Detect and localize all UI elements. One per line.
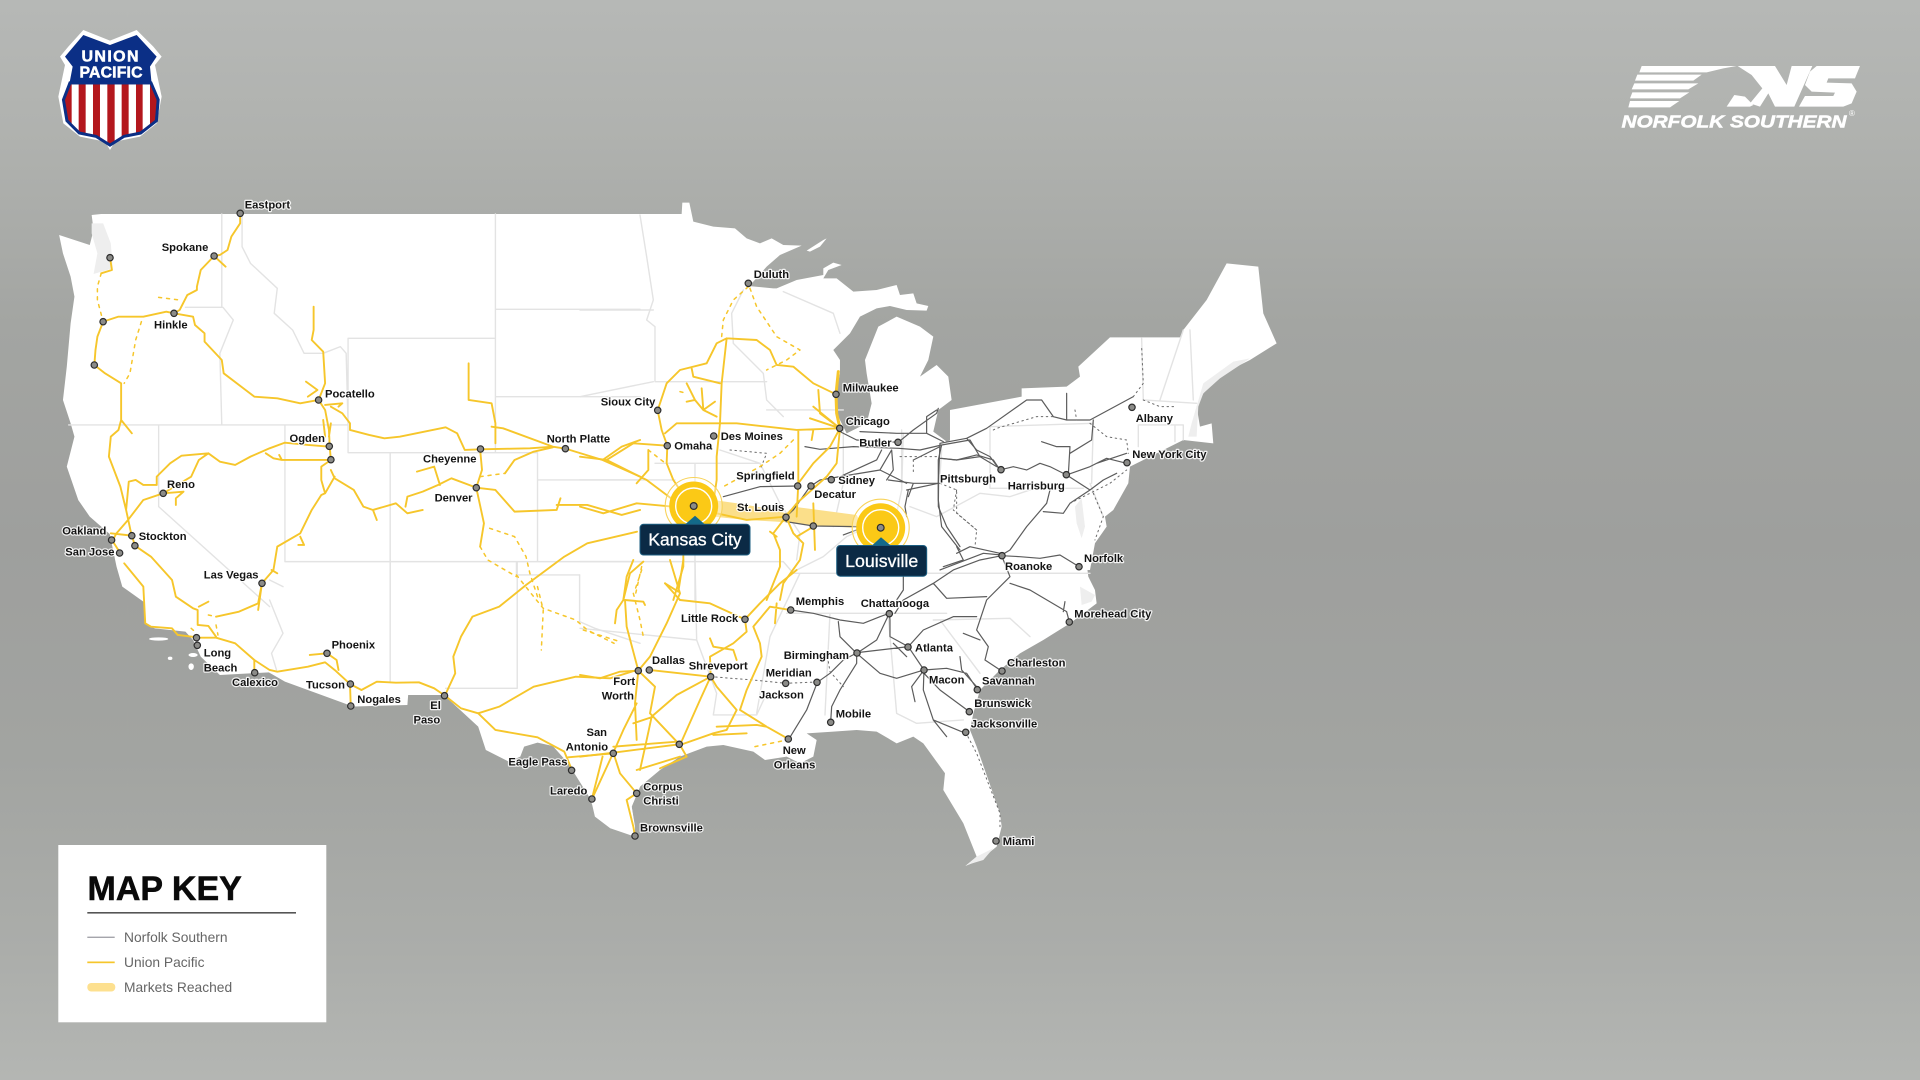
Reno: Reno	[167, 479, 195, 491]
Corpus Christi: Christi	[643, 796, 679, 808]
Albany	[1129, 404, 1174, 425]
Denver: Denver	[435, 492, 473, 504]
Hinkle	[154, 310, 188, 332]
Chicago: Chicago	[846, 416, 890, 428]
New York City	[1124, 449, 1207, 466]
Chattanooga	[861, 598, 930, 617]
logo: Norfolk Southern: NORFOLK SOUTHERN	[1622, 111, 1847, 131]
city markers and labels	[62, 200, 1207, 848]
Dallas: Dallas	[652, 655, 685, 667]
Las Vegas: Las Vegas	[204, 569, 259, 581]
Cheyenne	[423, 446, 484, 466]
Portland marker	[100, 318, 106, 325]
Shreveport	[689, 661, 748, 680]
Brownsville	[632, 822, 703, 839]
Las Vegas	[204, 569, 265, 586]
Reno	[160, 479, 195, 496]
Duluth	[745, 269, 789, 286]
Morehead City: Morehead City	[1074, 608, 1152, 620]
Chicago	[836, 416, 890, 431]
Norfolk: Norfolk	[1084, 553, 1124, 565]
Stockton: Stockton	[139, 531, 187, 543]
Duluth: Duluth	[754, 269, 789, 281]
Phoenix	[324, 639, 376, 656]
Laredo: Laredo	[550, 785, 587, 797]
Pocatello: Pocatello	[325, 388, 375, 400]
Meridian	[766, 667, 820, 686]
key item: Norfolk Southern: Norfolk Southern	[124, 930, 228, 945]
state borders	[69, 214, 1197, 723]
Pittsburgh	[940, 466, 1004, 485]
New Orleans: Orleans	[774, 759, 815, 771]
San Jose: San Jose	[65, 547, 114, 559]
Laredo	[550, 785, 595, 802]
Sioux City	[601, 397, 661, 413]
San Antonio: Antonio	[566, 741, 608, 753]
Dallas	[646, 655, 685, 673]
Sidney: Sidney	[838, 475, 876, 487]
St. Louis: St. Louis	[737, 502, 784, 514]
San Antonio: San	[586, 727, 607, 739]
Seattle marker	[107, 255, 113, 261]
Ogden: Ogden	[290, 433, 325, 445]
Springfield	[736, 471, 801, 489]
markets reached band	[713, 500, 863, 528]
Hinkle: Hinkle	[154, 320, 188, 332]
Spokane: Spokane	[162, 242, 208, 254]
Pocatello	[315, 388, 375, 403]
Charleston	[999, 658, 1066, 674]
logo: Norfolk Southern	[1622, 66, 1860, 131]
Milwaukee	[833, 383, 899, 397]
Oakland: Oakland	[62, 526, 107, 538]
Shreveport: Shreveport	[689, 661, 748, 673]
panel: map key	[58, 845, 326, 1022]
Eugene marker	[91, 362, 98, 368]
Decatur: Decatur	[814, 489, 857, 501]
Cheyenne: Cheyenne	[423, 454, 476, 466]
Little Rock: Little Rock	[681, 613, 739, 625]
Harrisburg: Harrisburg	[1008, 481, 1065, 493]
Tucson: Tucson	[306, 679, 345, 691]
Long Beach	[193, 634, 238, 675]
New Orleans: New	[783, 745, 806, 757]
coastal shading	[92, 223, 1250, 865]
Eastport: Eastport	[245, 200, 290, 212]
logo: Norfolk Southern: ®	[1849, 109, 1855, 118]
callout: Louisville: Louisville	[845, 551, 918, 571]
El Paso	[414, 692, 448, 726]
Morehead City	[1066, 608, 1152, 625]
Pittsburgh: Pittsburgh	[940, 473, 996, 485]
Savannah: Savannah	[982, 676, 1035, 688]
Brownsville: Brownsville	[640, 822, 703, 834]
Charleston: Charleston	[1007, 658, 1066, 670]
Jackson: Jackson	[759, 690, 804, 702]
Des Moines: Des Moines	[721, 431, 783, 443]
Denver	[435, 484, 479, 504]
Macon	[921, 667, 965, 686]
Sioux City: Sioux City	[601, 397, 656, 409]
Brunswick: Brunswick	[974, 698, 1032, 710]
Brunswick	[966, 698, 1032, 715]
Nogales: Nogales	[357, 694, 401, 706]
Savannah	[974, 676, 1035, 693]
Corpus Christi: Corpus	[643, 782, 682, 794]
Roanoke: Roanoke	[1005, 561, 1052, 573]
Roanoke	[999, 552, 1052, 573]
Long Beach: Long	[204, 648, 231, 660]
Corpus Christi	[634, 782, 682, 808]
El Paso: El	[430, 700, 441, 712]
Salt Lake marker	[328, 456, 334, 463]
key item: Markets Reached: Markets Reached	[124, 980, 232, 995]
Jacksonville: Jacksonville	[971, 719, 1037, 731]
key item: Union Pacific	[87, 955, 205, 970]
Fort Worth: Worth	[602, 690, 634, 702]
key item: Union Pacific: Union Pacific	[124, 955, 205, 970]
logo: Union Pacific shield: PACIFIC	[80, 64, 142, 81]
Eagle Pass: Eagle Pass	[508, 757, 567, 769]
North Platte	[547, 433, 610, 452]
callout: Kansas City	[640, 478, 750, 555]
Ogden	[290, 433, 332, 449]
Mobile	[828, 708, 871, 726]
logo: Union Pacific shield: UNION	[82, 48, 138, 66]
El Paso: Paso	[414, 714, 440, 726]
Fort Worth: Fort	[613, 676, 635, 688]
Nogales	[348, 694, 401, 709]
Jackson	[759, 680, 804, 702]
Mobile: Mobile	[836, 708, 871, 720]
Eagle Pass	[508, 757, 575, 774]
Norfolk	[1076, 553, 1124, 570]
Fort Worth	[602, 668, 642, 702]
Memphis	[788, 596, 844, 613]
Meridian: Meridian	[766, 667, 812, 679]
St. Louis	[737, 502, 816, 529]
Springfield: Springfield	[736, 471, 795, 483]
Albany: Albany	[1136, 413, 1174, 425]
callout: Louisville	[837, 499, 927, 576]
Calexico	[232, 670, 278, 689]
San Antonio	[566, 727, 616, 756]
Union Pacific rail lines	[94, 213, 840, 836]
logo: Union Pacific shield	[58, 30, 162, 150]
New Orleans	[774, 736, 815, 771]
Miami: Miami	[1003, 836, 1034, 848]
Omaha: Omaha	[674, 441, 713, 453]
Milwaukee: Milwaukee	[843, 383, 899, 395]
Spokane	[162, 242, 217, 259]
Stockton	[129, 531, 187, 549]
callout: Kansas City: Kansas City	[648, 530, 742, 550]
Chattanooga: Chattanooga	[861, 598, 930, 610]
Houston marker	[676, 741, 682, 748]
Eastport	[237, 200, 290, 216]
Jacksonville	[962, 719, 1037, 736]
map key heading: MAP KEY	[88, 870, 242, 908]
Decatur	[808, 483, 857, 501]
Harrisburg	[1008, 472, 1070, 493]
Memphis: Memphis	[796, 596, 844, 608]
Phoenix: Phoenix	[332, 639, 376, 651]
land mass	[59, 203, 1277, 866]
Atlanta: Atlanta	[915, 643, 954, 655]
Macon: Macon	[929, 674, 965, 686]
map of the United States	[59, 200, 1277, 866]
New York City: New York City	[1132, 449, 1207, 461]
Oakland	[62, 526, 115, 543]
Birmingham: Birmingham	[784, 650, 849, 662]
North Platte: North Platte	[547, 433, 610, 445]
Long Beach: Beach	[204, 663, 238, 675]
Butler: Butler	[859, 437, 892, 449]
Norfolk Southern rail lines	[711, 347, 1177, 827]
Calexico: Calexico	[232, 677, 278, 689]
